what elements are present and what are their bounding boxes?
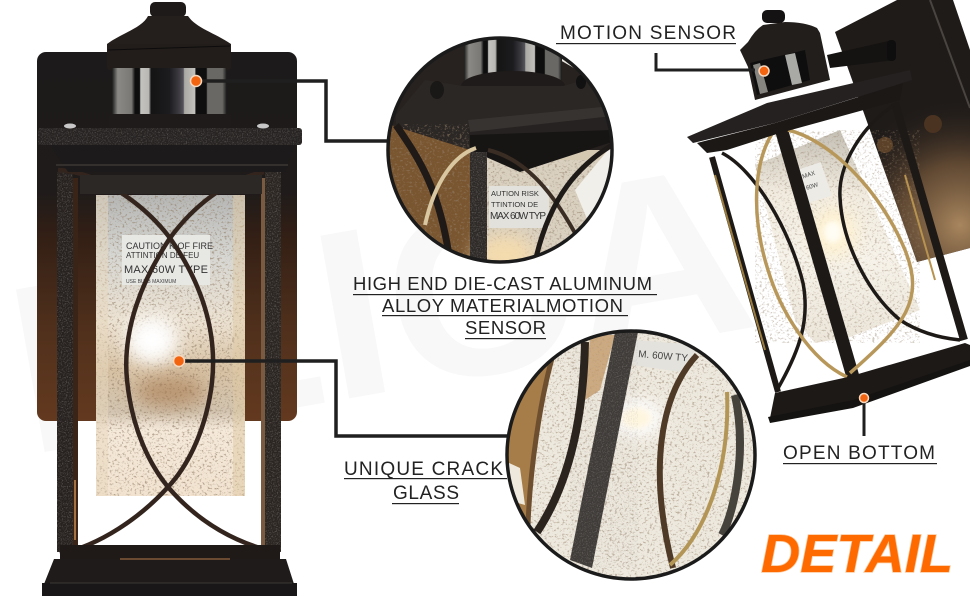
arcs (396, 125, 612, 262)
glass warning label: ATTINTION DE FEU (126, 251, 199, 260)
lower glass area (472, 150, 607, 160)
callout line: glass to zoom circle (185, 361, 510, 436)
glass label: 60W (805, 182, 819, 192)
callout dot: sensor (190, 76, 202, 86)
roof (38, 128, 302, 194)
label: motion sensor: MOTION SENSOR (560, 23, 736, 44)
callout line: open bottom (862, 402, 866, 436)
left warm region (508, 366, 548, 518)
callout dot: side sensor (759, 66, 769, 76)
bulb glow (611, 400, 663, 436)
motion sensor housing (64, 2, 269, 128)
roof (687, 70, 912, 153)
mounting arm (827, 40, 896, 68)
label: die-cast aluminum (353, 273, 657, 339)
wall plate (835, 0, 970, 262)
label: die-cast aluminum: SENSOR (465, 317, 546, 338)
zoom circle: die-cast aluminum (388, 38, 612, 275)
callout dot: open bottom (860, 394, 868, 402)
label: die-cast aluminum: ALLOY MATERIALMOTION (382, 295, 623, 316)
label: unique crack glass (344, 459, 507, 504)
plate bolts (877, 115, 942, 153)
crossing arcs (58, 170, 274, 554)
frame bars (528, 332, 740, 568)
label: TTINTION DE (491, 200, 538, 209)
glass warning label: CAUTION K OF FIRE (126, 241, 213, 251)
label: MAX 60W TYP (490, 211, 546, 222)
callout dot: glass (174, 356, 184, 366)
glass label: MAX (802, 171, 816, 180)
front lantern (37, 2, 302, 596)
glass label (798, 162, 832, 203)
post (470, 152, 487, 264)
label: unique crack glass: GLASS (393, 483, 459, 504)
roof front edge (468, 127, 474, 152)
glass shade (96, 195, 245, 496)
base (768, 343, 970, 423)
glass warning label (122, 235, 213, 285)
detail heading: DETAIL (761, 524, 953, 584)
lantern posts (712, 103, 964, 392)
glass warning label: MAX 60W TYPE (124, 264, 208, 276)
side view lantern (687, 0, 970, 423)
sensor stripes (464, 38, 562, 80)
motion sensor housing (740, 10, 830, 100)
lower open frame background (73, 421, 265, 546)
base (42, 545, 297, 596)
label (632, 340, 700, 372)
watermark: LLICA (0, 112, 771, 505)
wall plate (37, 52, 297, 421)
label: M. 60W TY (638, 349, 689, 364)
upper wall plate and background (388, 38, 612, 150)
label: die-cast aluminum: HIGH END DIE-CAST ALUMINUM (353, 273, 652, 294)
glass warning label: USE BULB MAXIMUM (126, 279, 176, 285)
label: unique crack glass: UNIQUE CRACK (344, 459, 503, 480)
label: open bottom: OPEN BOTTOM (783, 443, 935, 464)
callout line: sensor to zoom circle (200, 81, 388, 141)
label (489, 186, 549, 228)
roof top surface (461, 86, 565, 101)
zoom circle: crack glass (507, 330, 757, 580)
glass shade (755, 130, 920, 343)
side frame posts (57, 172, 281, 552)
oval cage arcs (722, 103, 960, 390)
label: AUTION RISK (491, 189, 539, 198)
callout line: side sensor (656, 53, 755, 70)
